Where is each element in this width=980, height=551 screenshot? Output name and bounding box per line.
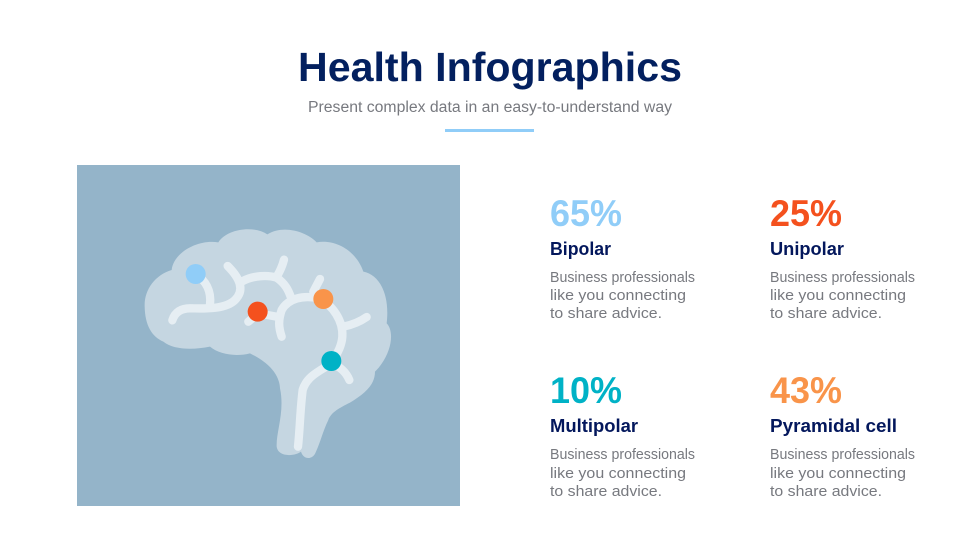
node: teal (321, 351, 341, 371)
value: 25% (770, 193, 842, 234)
node: orange (313, 289, 333, 309)
label: Unipolar (770, 239, 844, 259)
description: to share advice. (550, 484, 662, 500)
description: like you connecting (770, 466, 906, 482)
description (770, 447, 915, 500)
stat: Bipolar (550, 193, 695, 322)
stat: Unipolar (770, 193, 915, 322)
label: Bipolar (550, 239, 611, 259)
description: to share advice. (550, 306, 662, 322)
description: Business professionals (550, 270, 695, 286)
description (770, 270, 915, 322)
panel: brain illustration (77, 165, 460, 506)
description: like you connecting (550, 466, 686, 482)
description (550, 270, 695, 322)
description: to share advice. (770, 306, 882, 322)
icon: brain (145, 229, 391, 458)
description: like you connecting (550, 288, 686, 304)
stat: Pyramidal cell (770, 370, 915, 500)
description: Business professionals (770, 270, 915, 286)
node: red orange (248, 302, 268, 322)
description: Business professionals (550, 447, 695, 463)
subtitle: Present complex data in an easy-to-understand way (308, 99, 672, 116)
description: to share advice. (770, 484, 882, 500)
node: light blue (186, 264, 206, 284)
brain silhouette (145, 229, 391, 458)
title: Health Infographics (298, 44, 682, 90)
value: 65% (550, 193, 622, 234)
value: 43% (770, 370, 842, 411)
description: like you connecting (770, 288, 906, 304)
label: Multipolar (550, 416, 638, 436)
title underline (445, 129, 534, 132)
label: Pyramidal cell (770, 416, 897, 436)
nerve branches (172, 260, 367, 447)
value: 10% (550, 370, 622, 411)
description: Business professionals (770, 447, 915, 463)
stat: Multipolar (550, 370, 695, 500)
description (550, 447, 695, 500)
